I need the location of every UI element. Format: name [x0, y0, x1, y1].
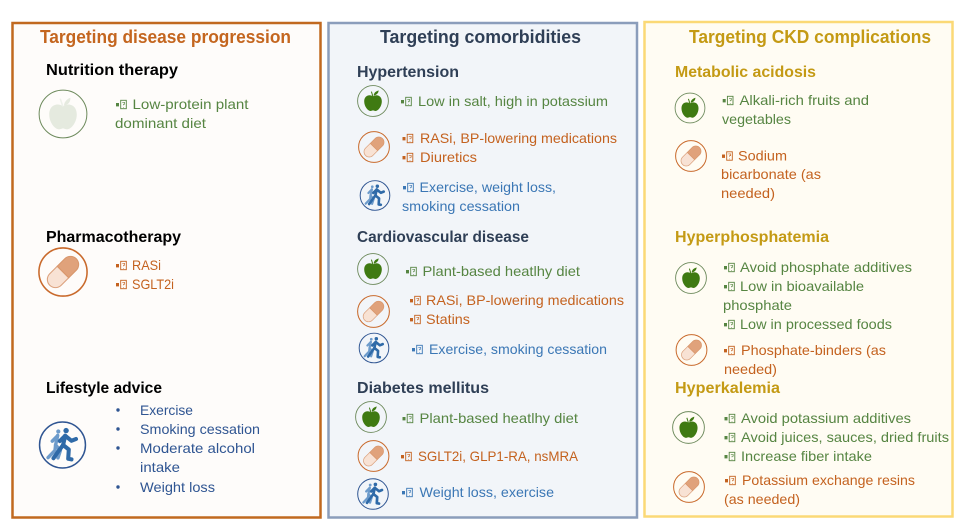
text: potassium diet advice: Avoid potassium additives	[741, 410, 911, 426]
text: sodium bicarbonate: bicarbonate (as	[721, 166, 821, 182]
text: hypertension medications: Diuretics	[420, 149, 477, 165]
panel: targeting disease progression	[12, 23, 320, 518]
text: potassium exchange resins	[724, 472, 915, 507]
icon: apple	[356, 402, 386, 432]
icon: apple	[675, 93, 705, 123]
text: alkali-rich fruits: Alkali-rich fruits and	[740, 92, 869, 108]
icon: pill	[676, 335, 707, 365]
text: exercise, weight loss: Exercise, weight loss,	[420, 179, 556, 195]
text: RASi and SGLT2i: RASi	[132, 257, 161, 273]
list: lifestyle advice: Smoking cessation	[140, 421, 260, 437]
subheading: metabolic acidosis: Metabolic acidosis	[675, 64, 816, 81]
text: RASi and SGLT2i: SGLT2i	[132, 276, 174, 292]
heading: targeting disease progression: Targeting disease progression	[40, 26, 291, 47]
text: potassium exchange resins: (as needed)	[724, 491, 800, 507]
text: alkali-rich fruits	[722, 92, 869, 127]
text: phosphate diet advice: phosphate	[723, 297, 792, 313]
icon: pill	[358, 441, 389, 471]
list: lifestyle advice	[116, 402, 260, 495]
icon: apple	[676, 263, 706, 293]
icon: pill	[359, 132, 389, 162]
list: lifestyle advice: Exercise	[140, 402, 193, 418]
icon: apple	[358, 86, 388, 116]
text: low-protein diet: dominant diet	[115, 115, 206, 131]
heading: targeting comorbidities: Targeting comorbidities	[380, 26, 581, 47]
icon: pale apple	[39, 90, 87, 138]
text: potassium diet advice: Increase fiber intake	[741, 448, 872, 464]
text: phosphate-binders	[724, 342, 886, 377]
text: phosphate-binders: Phosphate-binders (as	[741, 342, 886, 358]
subheading: diabetes mellitus: Diabetes mellitus	[357, 380, 489, 397]
text: weight loss, exercise: Weight loss, exercise	[420, 484, 554, 500]
text: phosphate diet advice: Low in bioavailable	[740, 278, 864, 294]
text: phosphate-binders: needed)	[724, 361, 777, 377]
text: low in salt: Low in salt, high in potassium	[418, 93, 608, 109]
subheading: hypertension: Hypertension	[357, 64, 459, 81]
heading: targeting CKD complications: Targeting CKD complications	[689, 26, 931, 47]
text: phosphate diet advice: Low in processed foods	[740, 316, 892, 332]
list: lifestyle advice: intake	[140, 459, 180, 475]
subheading: lifestyle advice: Lifestyle advice	[46, 380, 162, 397]
text: plant-based diet: Plant-based heatlhy diet	[420, 410, 578, 426]
icon: pill	[39, 248, 87, 296]
icon: apple	[358, 254, 388, 284]
text: phosphate diet advice: Avoid phosphate additives	[740, 259, 912, 275]
text: plant-based diet: Plant-based heatlhy diet	[422, 263, 580, 279]
subheading: nutrition therapy: Nutrition therapy	[46, 62, 178, 79]
list: lifestyle advice: Moderate alcohol	[140, 440, 255, 456]
text: cardiovascular medications	[410, 292, 624, 327]
panel: targeting comorbidities	[328, 23, 637, 518]
text: sodium bicarbonate	[721, 148, 821, 201]
text: exercise, smoking cessation: Exercise, smoking cessation	[429, 341, 607, 357]
text: phosphate diet advice	[723, 259, 912, 332]
text: potassium exchange resins: Potassium exchange resins	[742, 472, 915, 488]
text: potassium diet advice: Avoid juices, sauces, dried fruits	[741, 429, 949, 445]
subheading: cardiovascular disease: Cardiovascular disease	[357, 229, 529, 246]
text: sodium bicarbonate: needed)	[721, 185, 775, 201]
text: diabetes medications: SGLT2i, GLP1-RA, nsMRA	[418, 448, 579, 464]
text: RASi and SGLT2i	[116, 257, 174, 292]
text: alkali-rich fruits: vegetables	[722, 111, 791, 127]
icon: runners	[40, 422, 85, 468]
text: low-protein diet	[115, 96, 249, 131]
panel: targeting CKD complications	[644, 22, 952, 516]
text: sodium bicarbonate: Sodium	[738, 148, 787, 164]
icon: runners	[358, 479, 388, 509]
text: cardiovascular medications: RASi, BP-lowering medications	[426, 292, 624, 308]
text: low-protein diet: Low-protein plant	[132, 96, 249, 112]
subheading: pharmacotherapy: Pharmacotherapy	[46, 229, 181, 246]
subheading: hyperphosphatemia: Hyperphosphatemia	[675, 229, 829, 246]
icon: apple	[673, 412, 704, 443]
text: hypertension medications	[402, 130, 617, 165]
list: lifestyle advice: Weight loss	[140, 479, 215, 495]
icon: pill	[674, 472, 704, 502]
icon: pill	[676, 141, 706, 171]
text: exercise, weight loss	[402, 179, 556, 214]
text: exercise, weight loss: smoking cessation	[402, 198, 520, 214]
icon: runners	[359, 333, 389, 363]
subheading: hyperkalemia: Hyperkalemia	[675, 380, 780, 397]
text: potassium diet advice	[724, 410, 949, 464]
icon: pill	[358, 296, 389, 327]
text: cardiovascular medications: Statins	[426, 311, 470, 327]
icon: runners	[360, 181, 390, 210]
text: hypertension medications: RASi, BP-lowering medications	[420, 130, 617, 146]
